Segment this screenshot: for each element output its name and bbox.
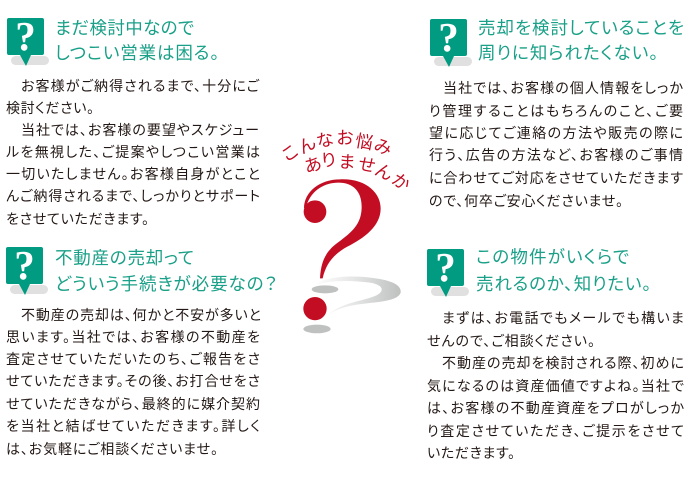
heading: procedure: 不動産の売却って (55, 248, 194, 268)
text block: procedure: を当社と結ばせていただきます。詳しく (6, 418, 260, 434)
panel: price (427, 244, 684, 461)
panel: privacy (429, 14, 684, 209)
panel: procedure (6, 242, 277, 457)
heading: procedure: どういう手続きが必要なの？ (55, 274, 277, 294)
text block: procedure: は、お気軽にご相談くださいませ。 (6, 441, 218, 457)
heading: privacy (478, 18, 684, 63)
text block: still considering: をさせていただきます。 (6, 211, 149, 227)
text block: privacy (429, 80, 683, 209)
central question mark graphic (277, 128, 414, 333)
text block: procedure: せていただきながら、最終的に媒介契約 (6, 396, 260, 412)
text block: procedure (6, 307, 261, 457)
curved caption: ん (372, 159, 396, 185)
curved caption: り (319, 149, 339, 171)
text block: still considering: 当社では、お客様の要望やスケジュー (21, 122, 259, 138)
heading: price (476, 247, 651, 294)
curved caption: ま (338, 152, 356, 172)
text block: still considering (5, 78, 260, 227)
icon: question pin (427, 244, 469, 297)
text block: price: 気になるのは資産価値ですよね。当社で (427, 378, 684, 394)
text block: price: り査定させていただき、ご提示をさせて (427, 423, 684, 439)
text block: procedure: せていただきます。その後、お打合せをさ (6, 373, 260, 389)
text block: still considering: ルを無視した、ご提案やしつこい営業は (5, 144, 260, 160)
icon: question pin (7, 13, 49, 66)
heading: privacy: 売却を検討していることを (478, 18, 684, 38)
curved caption: か (388, 169, 414, 195)
text block: still considering: 一切いたしません。お客様自身がとこと (6, 166, 260, 182)
text block: price: いただきます。 (427, 445, 515, 461)
text block: still considering: お客様がご納得されるまで、十分にご (21, 78, 260, 94)
curved caption: な (314, 128, 336, 152)
icon: question pin (6, 242, 48, 295)
heading: price: この物件がいくらで (476, 247, 629, 267)
curved caption: あ (302, 153, 324, 177)
text block: privacy: 行う、広告の方法など、お客様のご事情 (429, 147, 683, 163)
text block: privacy: に合わせてご対応をさせていただきます (429, 170, 683, 186)
text block: still considering: 検討ください。 (6, 100, 94, 116)
text block: privacy: り管理することはもちろんのこと、ご要 (429, 103, 683, 119)
text block: procedure: 思います。当社では、お客様の不動産を (6, 329, 260, 345)
curved caption: こ (277, 140, 303, 166)
curved caption: 悩 (354, 131, 374, 153)
text block: privacy: ので、何卒ご安心くださいませ。 (429, 193, 623, 209)
heading: still considering: しつこい営業は困る。 (55, 43, 219, 63)
heading: still considering: まだ検討中なので (55, 18, 194, 38)
text block: procedure: 不動産の売却は、何かと不安が多いと (21, 307, 261, 323)
text block: price: まずは、お電話でもメールでも構いま (442, 310, 684, 326)
heading: price: 売れるのか、知りたい。 (476, 274, 651, 294)
curved caption (277, 128, 414, 195)
panel: still considering (5, 13, 260, 227)
heading: still considering (55, 18, 219, 63)
heading: procedure (55, 248, 277, 294)
text block: still considering: んご納得されるまで、しっかりとサポート (6, 188, 260, 204)
text block: privacy: 望に応じてご連絡の方法や販売の際に (429, 125, 683, 141)
text block: price: は、お客様の不動産資産をプロがしっか (427, 400, 684, 416)
text block: privacy: 当社では、お客様の個人情報をしっか (443, 80, 683, 96)
curved caption: せ (356, 153, 378, 177)
text block: price: 不動産の売却を検討される際、初めに (442, 355, 684, 371)
question mark shadow (303, 277, 401, 333)
heading: privacy: 周りに知られたくない。 (478, 43, 658, 63)
text block: price: せんので、ご相談ください。 (427, 333, 595, 349)
curved caption: お (336, 128, 354, 148)
question mark (303, 179, 381, 320)
curved caption: み (371, 135, 395, 159)
text block: price (427, 310, 684, 461)
curved caption: ん (295, 132, 319, 158)
text block: procedure: 査定させていただいたのち、ご報告をさ (6, 351, 260, 367)
icon: question pin (430, 14, 472, 67)
